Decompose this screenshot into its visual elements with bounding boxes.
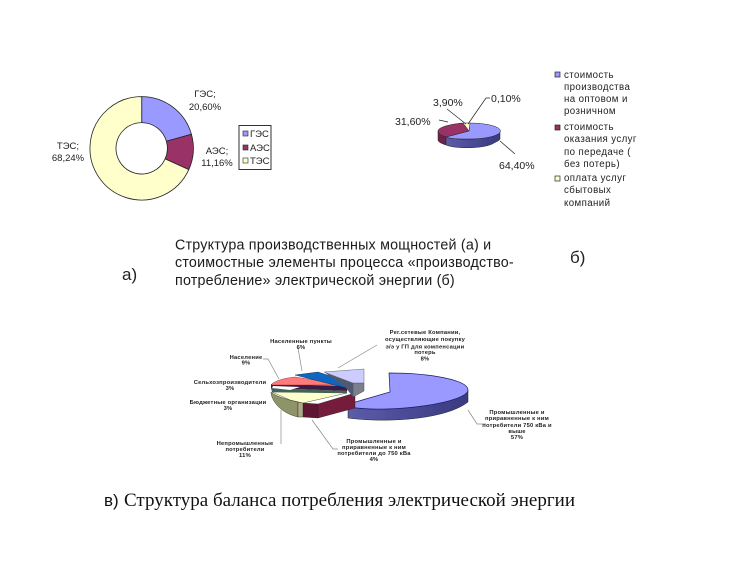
- label: large industrial: потребители 750 кВа и: [482, 422, 552, 429]
- slice: large industrial 57% top: [348, 373, 468, 409]
- value labels: [395, 93, 535, 172]
- label: small industrial: 4%: [370, 457, 378, 463]
- legend: cost elements: на оптовом и: [564, 94, 628, 105]
- slice: agriculture 3%: [271, 384, 348, 391]
- value labels: 64,40%: [499, 160, 535, 172]
- label: large industrial: 57%: [511, 435, 523, 441]
- label: АЭС: 11,16%: [201, 158, 233, 169]
- label: population: 9%: [242, 360, 250, 366]
- label: large industrial: приравненные к ним: [485, 416, 549, 422]
- legend: cost elements: стоимость: [564, 70, 614, 81]
- legend: donut: АЭС: [250, 143, 270, 154]
- slice: АЭС 11,16%: [165, 134, 193, 170]
- label: ГЭС: ГЭС;: [194, 89, 216, 100]
- label: ГЭС: 20,60%: [189, 102, 222, 113]
- slice: ГЭС 20,60%: [142, 97, 191, 141]
- slice: small industrial 4%: [303, 393, 355, 418]
- caption: consumption balance structure: в): [104, 491, 119, 510]
- label: agriculture: Сельхозпроизводители: [194, 380, 266, 386]
- label: а): а): [122, 265, 137, 284]
- value labels: 31,60%: [395, 116, 431, 128]
- legend: cost elements: сбытовых: [564, 185, 611, 196]
- legend: cost elements: стоимость: [564, 122, 614, 133]
- label: grid companies: 8%: [421, 356, 429, 362]
- caption: structure of capacities and cost elements: стоимостные элементы процесса «производство-: [175, 255, 514, 271]
- legend: cost elements: компаний: [564, 198, 610, 209]
- slice side: production: [446, 131, 500, 148]
- label: small industrial: приравненные к ним: [342, 445, 406, 451]
- legend: donut: ТЭС: [250, 156, 270, 167]
- caption: structure of capacities and cost elements: потребление» электрической энергии (б): [175, 273, 455, 289]
- legend: cost elements: по передаче (: [564, 147, 631, 158]
- label: non-industrial: Непромышленные: [217, 441, 273, 447]
- label: settlements: 6%: [297, 345, 305, 351]
- exploded 3D pie chart: consumption balance: [190, 330, 552, 463]
- legend: cost elements: производства: [564, 82, 630, 93]
- slice: population 9%: [271, 377, 347, 385]
- slice: grid companies 8%: [353, 383, 364, 397]
- label: budget organisations: 3%: [224, 406, 232, 412]
- value labels: 3,90%: [433, 97, 463, 109]
- leader lines: [263, 345, 486, 449]
- slice top: sales: [463, 123, 470, 131]
- label: б): б): [570, 248, 585, 267]
- slice: non-industrial 11%: [271, 392, 347, 417]
- legend: cost elements: оплата услуг: [564, 173, 626, 184]
- label: АЭС: АЭС;: [206, 146, 228, 157]
- legend: cost elements: розничном: [564, 106, 616, 117]
- label: large industrial: выше: [508, 429, 526, 435]
- value labels: 0,10%: [491, 93, 521, 105]
- caption: structure of capacities and cost elements: Структура производственных мощностей (а) и: [175, 238, 491, 254]
- chart labels: [190, 330, 552, 463]
- slice top: production: [446, 123, 500, 139]
- label: non-industrial: потребители: [225, 446, 265, 453]
- legend: cost elements: [555, 70, 637, 209]
- label: ТЭС: 68,24%: [52, 153, 85, 164]
- 3D pie chart: cost elements: [395, 70, 637, 209]
- label: small industrial: Промышленные и: [346, 439, 402, 445]
- slice top: transmission: [438, 123, 469, 137]
- label: ТЭС: ТЭС;: [57, 141, 79, 152]
- slice: ТЭС 68,24%: [90, 97, 189, 200]
- legend: donut: [239, 126, 271, 170]
- legend: cost elements: оказания услуг: [564, 134, 637, 145]
- label: budget organisations: Бюджетные организации: [190, 400, 266, 406]
- slice side: transmission: [438, 131, 446, 145]
- label: agriculture: 3%: [226, 386, 234, 392]
- slice: budget organisations 3%: [271, 388, 347, 393]
- slice: settlements 6%: [295, 372, 357, 392]
- label: grid companies: Рег.сетевые Компании,: [390, 330, 460, 336]
- caption: consumption balance structure: Структура баланса потребления электрической энергии: [124, 490, 575, 511]
- leader lines: [439, 98, 515, 154]
- label: grid companies: э/э у ГП для компенсации: [386, 344, 465, 350]
- legend: donut: ГЭС: [250, 129, 269, 140]
- slice: large industrial 57% side: [348, 390, 468, 420]
- label: grid companies: потерь: [414, 350, 436, 356]
- donut chart: generating capacity: [52, 89, 271, 200]
- label: settlements: Населенные пункты: [270, 339, 332, 345]
- legend: cost elements: без потерь): [564, 159, 620, 170]
- label: large industrial: Промышленные и: [489, 410, 545, 416]
- label: non-industrial: 11%: [239, 453, 251, 459]
- label: population: Население: [230, 355, 262, 361]
- label: grid companies: осуществляющие покупку: [385, 337, 466, 343]
- label: small industrial: потребители до 750 кВа: [337, 450, 411, 457]
